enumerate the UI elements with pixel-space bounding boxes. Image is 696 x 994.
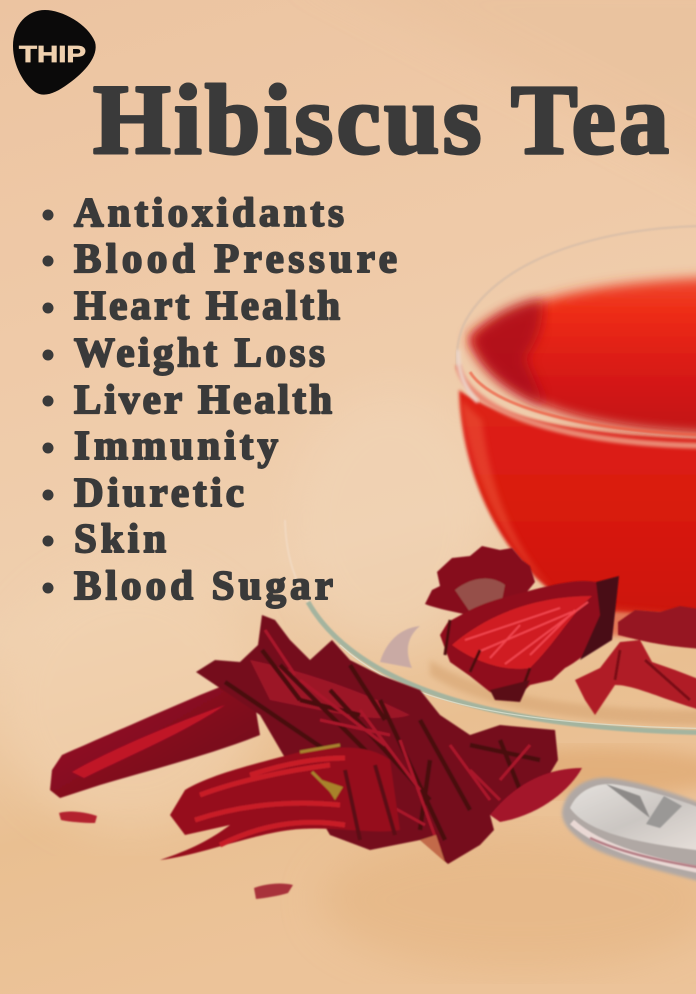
tea surface xyxy=(468,276,696,436)
cup body with red tea xyxy=(459,390,696,620)
item: Antioxidants: Antioxidants xyxy=(74,189,344,235)
benefits list xyxy=(42,189,397,608)
hibiscus fragments xyxy=(59,812,293,899)
item: Blood Pressure: Blood Pressure xyxy=(74,235,397,281)
hibiscus: upper right dried flower xyxy=(425,546,696,720)
item: Immunity: Immunity xyxy=(74,422,278,468)
item: Heart Health: Heart Health xyxy=(74,282,340,328)
upper glass rim xyxy=(457,226,696,370)
tea cup xyxy=(457,226,696,642)
title: Hibiscus Tea xyxy=(93,64,669,175)
hibiscus: main dried flower xyxy=(50,615,582,864)
saucer: glass plate xyxy=(285,520,696,733)
logo: THIP xyxy=(13,10,96,95)
spoon xyxy=(562,778,696,892)
item: Weight Loss: Weight Loss xyxy=(74,329,325,375)
item: Blood Sugar: Blood Sugar xyxy=(74,562,333,608)
logo: THIP: THIP xyxy=(19,41,86,67)
dark reflection xyxy=(472,300,545,405)
item: Diuretic: Diuretic xyxy=(74,469,244,515)
front glass rim xyxy=(458,365,696,446)
item: Skin: Skin xyxy=(74,515,166,561)
item: Liver Health: Liver Health xyxy=(74,376,332,422)
